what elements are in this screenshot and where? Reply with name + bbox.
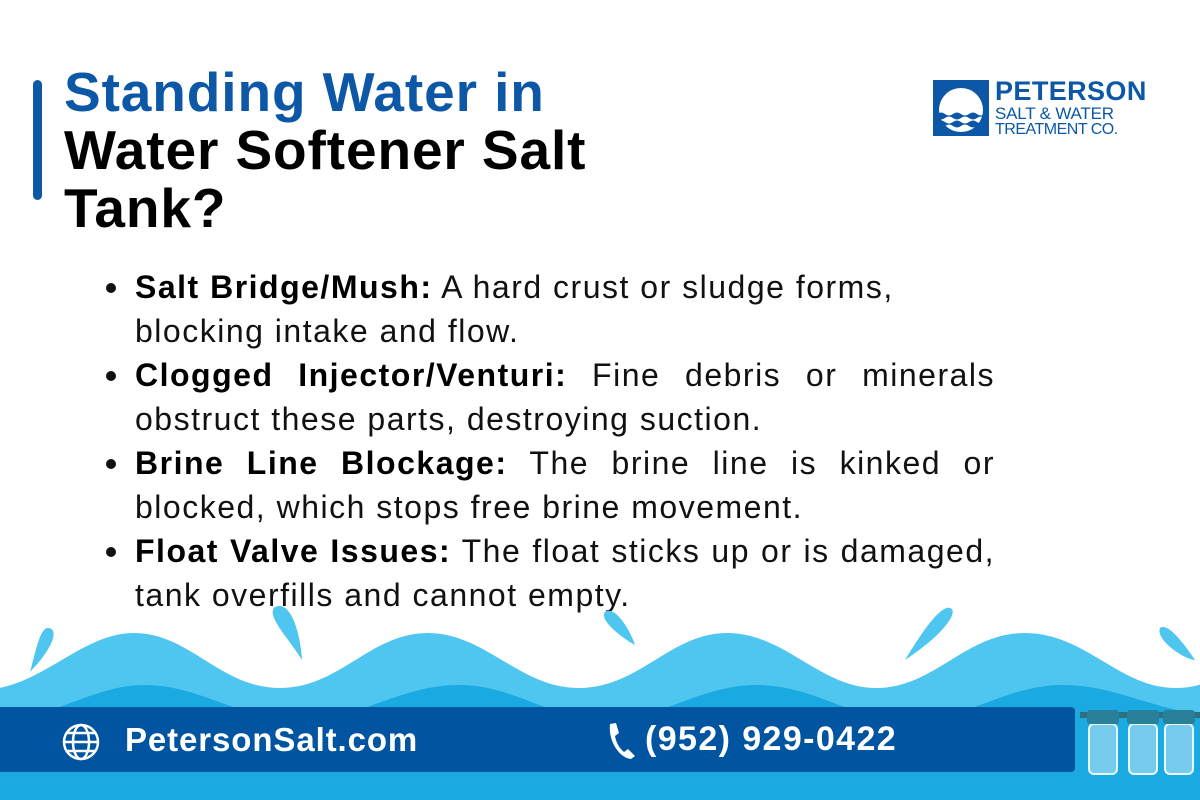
- website: PetersonSalt.com: [125, 721, 418, 758]
- logo text: [995, 76, 1147, 138]
- bullet: clogged injector: Clogged Injector/Venturi: Fine debris or minerals: [135, 357, 995, 393]
- title: [64, 61, 586, 239]
- waves: [0, 606, 1200, 800]
- logo icon: [933, 80, 989, 136]
- bullet: float valve: Float Valve Issues: The float sticks up or is damaged,: [135, 533, 995, 569]
- title: Standing Water in: [64, 61, 545, 123]
- logo text: TREATMENT CO.: [995, 121, 1118, 138]
- bullet: clogged injector: obstruct these parts, destroying suction.: [135, 401, 762, 437]
- logo text: PETERSON: [995, 76, 1147, 106]
- bullet: salt bridge: [100, 265, 995, 353]
- bullet list: [106, 269, 995, 613]
- icon: water filters: [1080, 710, 1200, 775]
- bullet: brine line: blocked, which stops free brine movement.: [135, 489, 803, 525]
- bullet: brine line: [100, 441, 995, 529]
- bullet: float valve: tank overfills and cannot empty.: [135, 577, 631, 613]
- bullet: float valve: [100, 529, 995, 617]
- bullet: salt bridge: Salt Bridge/Mush: A hard crust or sludge forms,: [135, 269, 894, 305]
- icon: globe: [62, 724, 100, 760]
- logo: [933, 76, 1147, 138]
- bullet: brine line: Brine Line Blockage: The brine line is kinked or: [135, 445, 995, 481]
- phone number: (952) 929-0422: [645, 720, 897, 758]
- icon: phone: [610, 723, 635, 759]
- accent bar: [33, 80, 42, 200]
- bullet: salt bridge: blocking intake and flow.: [135, 313, 519, 349]
- footer bar: [0, 707, 1075, 772]
- logo text: SALT & WATER: [995, 104, 1114, 123]
- droplets: [30, 628, 54, 672]
- title: Tank?: [64, 177, 226, 239]
- title: Water Softener Salt: [64, 119, 586, 181]
- bullet: clogged injector: [100, 353, 995, 441]
